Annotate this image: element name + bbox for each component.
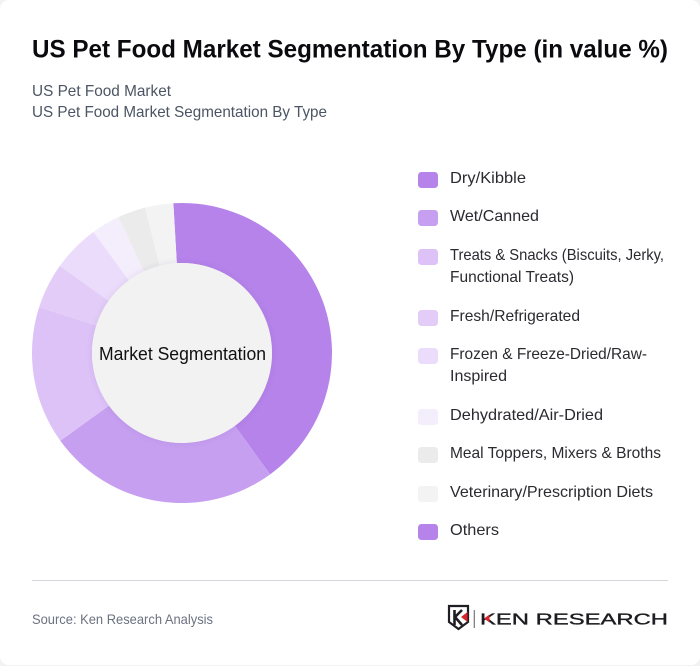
legend item: Wet/Canned — [418, 208, 539, 226]
legend item: Treats & Snacks: Treats & Snacks (Biscuits, Jerky, — [450, 247, 664, 264]
segment: Dehydrated/Air-Dried — [93, 217, 144, 280]
legend item: Frozen & Freeze-Dried/Raw-Inspired: Frozen & Freeze-Dried/Raw- — [450, 346, 647, 363]
legend item: Others: Others — [450, 522, 499, 539]
icon: shield mark — [449, 606, 468, 629]
wordmark: KEN RESEARCH — [480, 612, 668, 628]
legend item: Frozen & Freeze-Dried/Raw-Inspired: Inspired — [450, 368, 507, 385]
legend item: Dehydrated/Air-Dried: Dehydrated/Air-Dried — [450, 407, 603, 424]
subtitle: US Pet Food Market — [32, 83, 172, 100]
legend item: Others — [418, 522, 499, 540]
center label — [92, 263, 272, 443]
source note: Source: Ken Research Analysis — [32, 611, 213, 627]
segment: Treats & Snacks — [32, 307, 109, 441]
icon: red K accent — [484, 614, 490, 622]
segment: Dry/Kibble — [173, 203, 332, 474]
legend item: Dry/Kibble — [418, 170, 526, 188]
title: US Pet Food Market Segmentation By Type (in value %) — [32, 36, 668, 64]
segment: Meal Toppers, Mixers & Broths — [119, 208, 160, 271]
segment: Wet/Canned — [60, 406, 270, 503]
legend item: Treats & Snacks — [418, 247, 664, 286]
legend item: Wet/Canned: Wet/Canned — [450, 208, 539, 225]
legend item: Treats & Snacks: Functional Treats) — [450, 269, 574, 286]
legend item: Veterinary/Prescription Diets: Veterinary/Prescription Diets — [450, 484, 653, 501]
segment: Veterinary/Prescription Diets — [145, 203, 177, 266]
segment: Frozen & Freeze-Dried/Raw-Inspired — [60, 232, 129, 301]
segment: Fresh/Refrigerated — [39, 266, 109, 325]
center label: Market Segmentation — [99, 344, 266, 364]
subtitle: US Pet Food Market Segmentation By Type — [32, 104, 327, 121]
logo: Ken Research — [449, 606, 668, 629]
donut chart — [32, 203, 332, 503]
legend item: Frozen & Freeze-Dried/Raw-Inspired — [418, 346, 647, 385]
subtitle — [32, 83, 327, 121]
legend — [418, 170, 664, 540]
legend item: Fresh/Refrigerated: Fresh/Refrigerated — [450, 308, 580, 325]
legend item: Dry/Kibble: Dry/Kibble — [450, 170, 526, 187]
legend item: Meal Toppers, Mixers & Broths: Meal Toppers, Mixers & Broths — [450, 445, 661, 462]
